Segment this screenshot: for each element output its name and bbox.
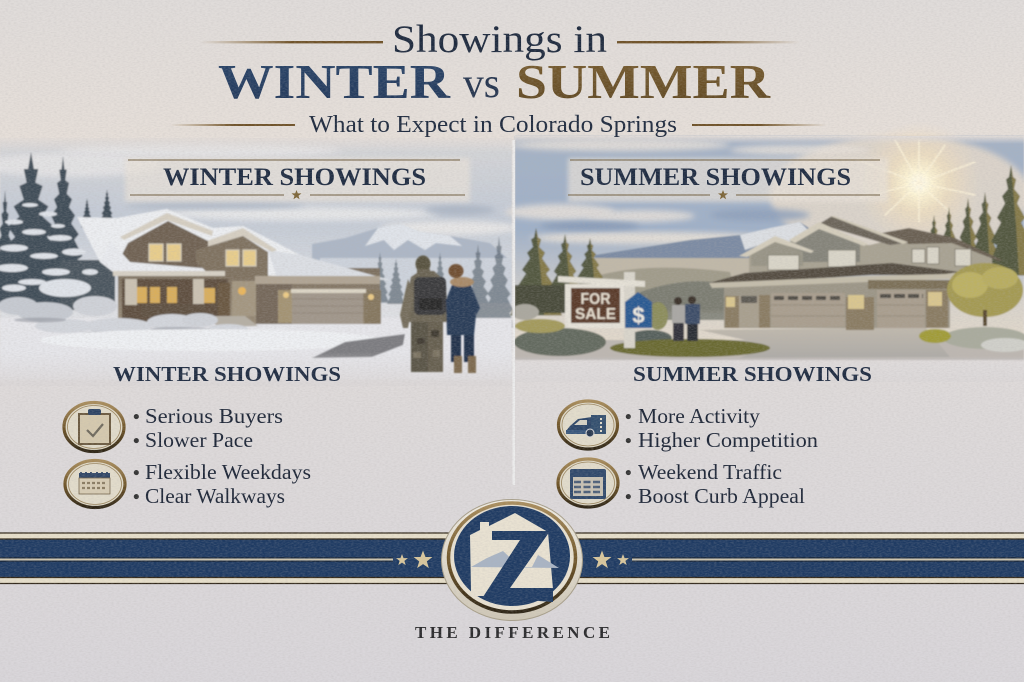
winter mountains [312, 224, 512, 303]
summer list [558, 401, 818, 508]
sign top board [558, 276, 645, 287]
for sale sign [558, 272, 652, 348]
subtitle: What to Expect in Colorado Springs [309, 112, 677, 138]
navy ribbon banner [0, 532, 1024, 584]
winter header plate [125, 158, 470, 202]
panel: winter scene [0, 138, 520, 386]
text: flexible weekdays: Flexible Weekdays [145, 460, 311, 484]
summer sky [515, 136, 1024, 358]
winter scene fade into paper [0, 352, 512, 386]
medallion rim [442, 500, 582, 620]
medallion house [470, 513, 553, 596]
winter bullets four: • [133, 487, 140, 508]
summer bullets one: • [625, 407, 632, 428]
summer bullets three: • [625, 463, 632, 484]
summer round tree [947, 263, 1023, 326]
winter plate rules [128, 160, 465, 195]
dollar tag: $ [632, 303, 645, 328]
ribbon stars right [592, 550, 629, 568]
for sale text: FOR [580, 291, 611, 308]
winter clouds [0, 142, 520, 235]
sign post [624, 272, 635, 348]
summer shrubs left [511, 302, 672, 356]
medallion navy disc [454, 506, 570, 606]
winter bullets three: • [133, 463, 140, 484]
summer lower walls [724, 280, 950, 328]
summer ground [515, 340, 1024, 360]
man in blue shirt [685, 296, 700, 341]
icon: clipboard with check [64, 402, 124, 452]
ribbon stars left [396, 550, 432, 568]
for sale text [575, 291, 616, 323]
summer roofs [882, 228, 1002, 261]
title block [170, 18, 827, 138]
text: clear walkways: Clear Walkways [145, 484, 285, 508]
winter plate title: WINTER SHOWINGS [163, 162, 426, 191]
title word: vs: vs [463, 61, 500, 107]
icon: calendar [65, 460, 125, 508]
sun with rays [857, 121, 981, 245]
winter list heading: WINTER SHOWINGS [113, 362, 341, 386]
winter snowfield [0, 318, 512, 380]
summer trees left [510, 228, 607, 315]
summer plate rules [568, 160, 880, 195]
title word: winter: WINTER [218, 54, 451, 109]
text: higher competition: Higher Competition [638, 428, 818, 452]
icon: weekend calendar [558, 459, 618, 507]
text: boost curb appeal: Boost Curb Appeal [638, 484, 805, 508]
summer warm glow [770, 135, 1024, 255]
summer bullets four: • [625, 487, 632, 508]
winter house walls [118, 268, 380, 324]
winter stone pillar [256, 284, 292, 324]
summer small garage door [739, 296, 759, 327]
sign frame [565, 284, 624, 328]
summer lawn [610, 339, 770, 357]
summer second garage door [877, 290, 925, 328]
winter background trees [371, 236, 516, 328]
summer lamp glow [726, 292, 942, 309]
summer trees right [924, 165, 1024, 284]
summer upper windows [768, 247, 971, 270]
title rule left [200, 41, 383, 43]
sign brown panel [571, 288, 620, 323]
winter list [64, 402, 311, 508]
summer couple [672, 296, 700, 341]
title rule right [617, 41, 800, 43]
winter plowed driveway [312, 334, 405, 358]
winter plate backing [125, 158, 470, 202]
winter shrubs [0, 296, 248, 335]
winter plate star [292, 190, 302, 199]
medallion gold ring [448, 503, 576, 612]
summer bullets two: • [625, 431, 632, 452]
winter garage door [291, 289, 366, 293]
winter porch [113, 271, 225, 276]
summer scene fade into paper [515, 356, 1024, 382]
summer header plate [568, 158, 888, 202]
summer main garage door [771, 293, 845, 327]
winter bullets two: • [133, 431, 140, 452]
summer plate backing [568, 158, 888, 202]
medallion z letter [483, 531, 553, 602]
text: more activity: More Activity [638, 404, 760, 428]
summer house [709, 216, 1002, 330]
winter couple [400, 256, 480, 373]
summer shrubs right [919, 327, 1024, 352]
winter scene top fade [0, 138, 512, 152]
summer clouds [505, 139, 870, 244]
logo medallion [442, 500, 582, 620]
medallion mountains [471, 551, 559, 568]
winter evergreen trees [0, 152, 115, 310]
title line: showings in: Showings in [392, 18, 607, 61]
summer plate star [718, 190, 728, 199]
panel: summer scene [505, 121, 1024, 382]
summer plate title: SUMMER SHOWINGS [580, 162, 851, 191]
winter snow on boughs [0, 203, 98, 297]
summer list heading: SUMMER SHOWINGS [633, 362, 872, 386]
woman in navy parka [446, 264, 480, 373]
subtitle rule right [692, 124, 827, 126]
winter snow mound [40, 329, 380, 351]
for sale text: SALE [575, 306, 616, 323]
winter upper windows [149, 244, 256, 266]
summer stone pillars [725, 290, 948, 330]
ribbon cream edge bottom [0, 577, 1024, 584]
tagline: THE DIFFERENCE [415, 623, 610, 642]
ribbon navy body [0, 539, 1024, 578]
text: serious buyers: Serious Buyers [145, 404, 283, 428]
title word: summer: SUMMER [516, 54, 771, 109]
subtitle rule left [170, 124, 295, 126]
summer scene top fade [515, 136, 1024, 144]
woman in light shirt [672, 297, 685, 341]
summer driveway [700, 327, 950, 358]
ribbon cream edge top [0, 532, 1024, 540]
text: slower pace: Slower Pace [145, 428, 253, 452]
summer upper walls [749, 240, 992, 275]
summer mountains [595, 222, 815, 320]
winter sky [0, 140, 512, 360]
winter house [77, 209, 390, 327]
center divider [512, 140, 515, 485]
man in camouflage [400, 256, 447, 372]
winter snowy roof [77, 209, 390, 280]
winter bullets one: • [133, 407, 140, 428]
icon: moving truck [558, 401, 618, 449]
text: weekend traffic: Weekend Traffic [638, 460, 782, 484]
